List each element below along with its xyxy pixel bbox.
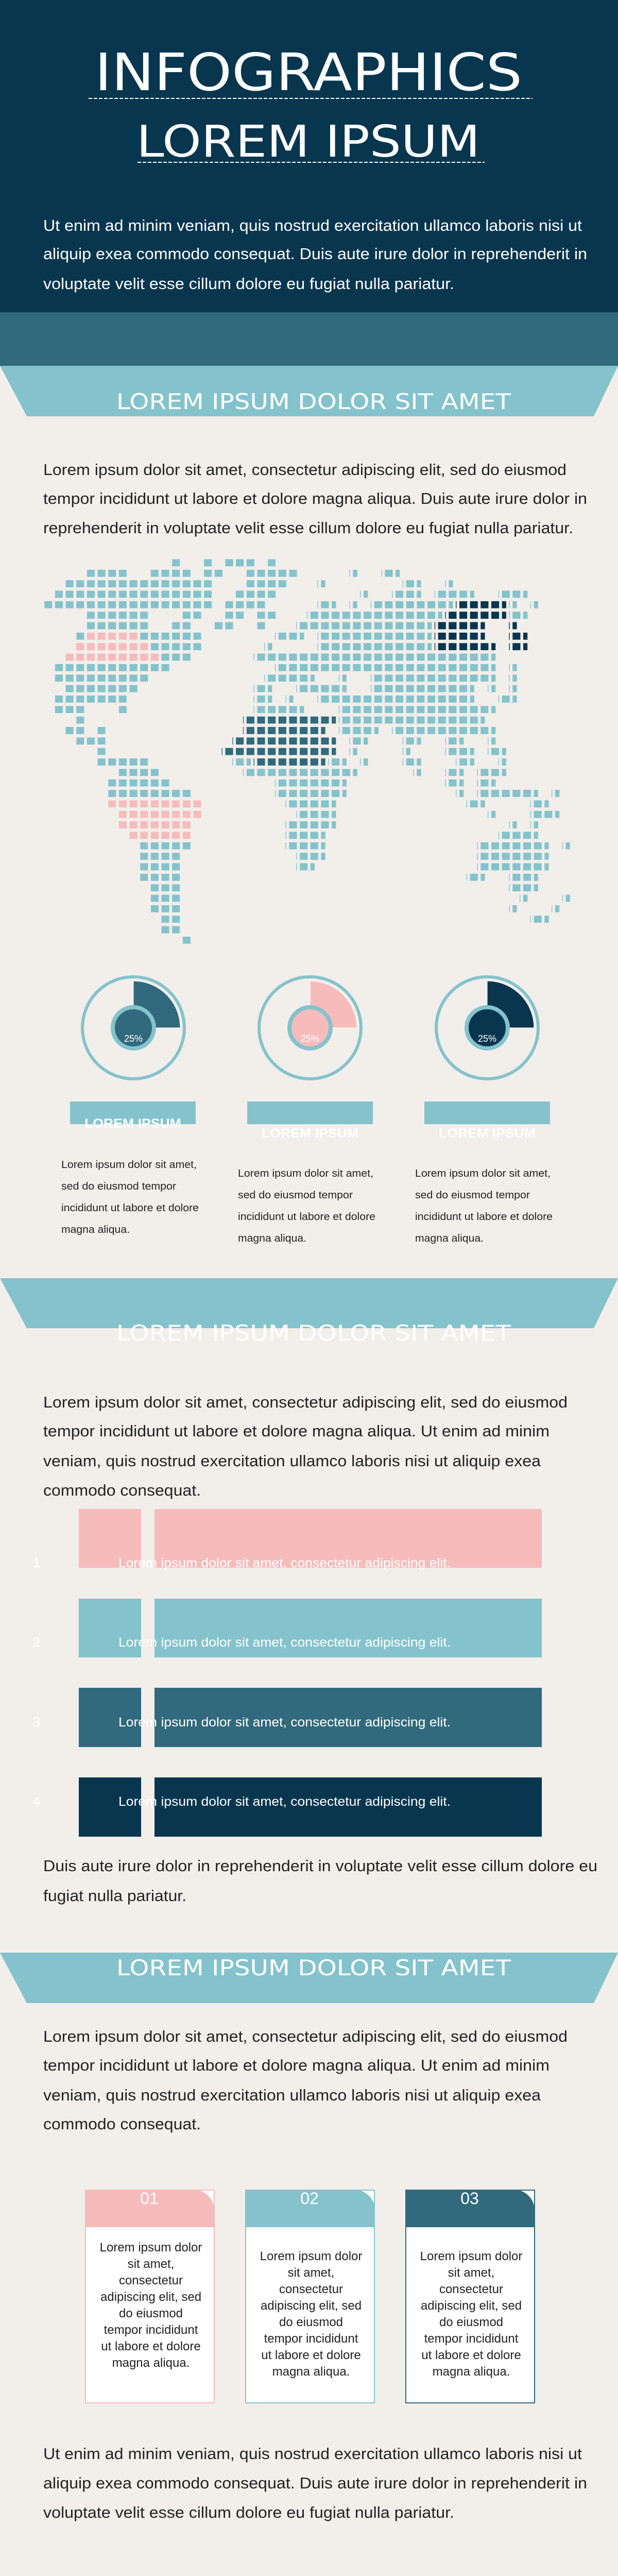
section 3 paragraph: tempor incididunt ut labore et dolore magna aliqua. Ut enim ad minim	[43, 2056, 550, 2074]
section 2 paragraph: Lorem ipsum dolor sit amet, consectetur adipiscing elit, sed do eiusmod	[43, 1393, 568, 1411]
card 03: 03	[460, 2189, 479, 2208]
card 02	[245, 2189, 375, 2403]
column text 3	[415, 1168, 553, 1244]
title line 1: INFOGRAPHICS	[95, 42, 522, 103]
section 2 paragraph: tempor incididunt ut labore et dolore magna aliqua. Ut enim ad minim	[43, 1422, 550, 1440]
world map (dotted)	[44, 559, 570, 944]
column text 1: sed do eiusmod tempor	[61, 1181, 176, 1192]
donut chart 3: 25%	[478, 1033, 496, 1044]
section 3 paragraph: veniam, quis nostrud exercitation ullamco laboris nisi ut aliquip exea	[43, 2086, 541, 2104]
section 3 ribbon heading	[0, 1953, 618, 2003]
card 01: ut labore et dolore	[101, 2340, 201, 2353]
bar 4: 4	[33, 1793, 40, 1809]
section 3 paragraph: Lorem ipsum dolor sit amet, consectetur adipiscing elit, sed do eiusmod	[43, 2027, 568, 2045]
donut chart 2: 25%	[301, 1033, 319, 1044]
label box 3: LOREM IPSUM	[439, 1126, 536, 1141]
bar 3: 3	[33, 1714, 40, 1730]
header panel	[0, 0, 618, 312]
card 01: adipiscing elit, sed	[100, 2290, 201, 2304]
header paragraph: Ut enim ad minim veniam, quis nostrud exercitation ullamco laboris nisi ut	[43, 216, 582, 234]
card 03: magna aliqua.	[433, 2365, 510, 2379]
bar 1	[33, 1509, 542, 1570]
donut chart 1	[82, 977, 184, 1079]
bar 1: 1	[33, 1555, 40, 1570]
column text 2: Lorem ipsum dolor sit amet,	[238, 1168, 373, 1179]
card 01: magna aliqua.	[112, 2356, 190, 2370]
card 03: do eiusmod	[439, 2315, 503, 2329]
label box 2: LOREM IPSUM	[262, 1126, 358, 1141]
card 02: tempor incididunt	[264, 2332, 358, 2346]
section 1 ribbon heading: LOREM IPSUM DOLOR SIT AMET	[116, 389, 511, 414]
card 03	[405, 2189, 535, 2403]
column text 1: Lorem ipsum dolor sit amet,	[61, 1159, 197, 1171]
bar 1: Lorem ipsum dolor sit amet, consectetur adipiscing elit.	[118, 1556, 451, 1570]
section 3 closing paragraph	[43, 2445, 587, 2521]
bar 2: 2	[33, 1634, 40, 1650]
section 3 closing paragraph: voluptate velit esse cillum dolore eu fugiat nulla pariatur.	[43, 2503, 454, 2521]
card 01	[85, 2189, 214, 2403]
card 03: tempor incididunt	[424, 2332, 519, 2346]
section 3 paragraph	[43, 2027, 568, 2133]
column text 1: incididunt ut labore et dolore	[61, 1202, 199, 1214]
card 02: Lorem ipsum dolor	[260, 2249, 362, 2263]
card 02: do eiusmod	[279, 2315, 343, 2329]
label box 1: LOREM IPSUM	[84, 1116, 181, 1131]
section 2 closing paragraph	[43, 1857, 597, 1905]
bar 3	[33, 1688, 542, 1747]
card 02: adipiscing elit, sed	[261, 2299, 362, 2313]
header paragraph	[43, 216, 587, 293]
teal band	[0, 312, 618, 366]
column text 2: magna aliqua.	[238, 1233, 306, 1244]
label box 1	[70, 1101, 196, 1131]
section 3 closing paragraph: Ut enim ad minim veniam, quis nostrud exercitation ullamco laboris nisi ut	[43, 2445, 582, 2463]
section 1 ribbon heading	[0, 366, 618, 416]
column text 1: magna aliqua.	[61, 1224, 130, 1235]
section 2 paragraph	[43, 1393, 568, 1499]
card 01: 01	[140, 2189, 159, 2208]
card 02: ut labore et dolore	[261, 2348, 361, 2362]
card 02: sit amet,	[288, 2266, 334, 2280]
section 1 paragraph: Lorem ipsum dolor sit amet, consectetur adipiscing elit, sed do eiusmod	[43, 461, 566, 479]
section 1 paragraph: reprehenderit in voluptate velit esse cillum dolore eu fugiat nulla pariatur.	[43, 519, 573, 537]
section 1 paragraph: tempor incididunt ut labore et dolore magna aliqua. Duis aute irure dolor in	[43, 489, 587, 507]
section 2 ribbon heading	[0, 1278, 618, 1346]
card 03: sit amet,	[448, 2266, 494, 2280]
column text 3: magna aliqua.	[415, 1233, 484, 1244]
section 3 paragraph: commodo consequat.	[43, 2115, 201, 2133]
card 01: do eiusmod	[119, 2307, 183, 2320]
column text 1	[61, 1159, 199, 1235]
card 01: Lorem ipsum dolor	[100, 2241, 202, 2255]
header paragraph: aliquip exea commodo consequat. Duis aute irure dolor in reprehenderit in	[43, 245, 587, 263]
section 1 paragraph	[43, 461, 587, 537]
column text 2	[238, 1168, 375, 1244]
section 2 paragraph: commodo consequat.	[43, 1481, 201, 1499]
bar 3: Lorem ipsum dolor sit amet, consectetur adipiscing elit.	[118, 1715, 451, 1730]
donut chart 1: 25%	[124, 1033, 143, 1044]
donut chart 2	[259, 977, 361, 1079]
column text 3: sed do eiusmod tempor	[415, 1190, 530, 1201]
card 02: magna aliqua.	[272, 2365, 350, 2379]
title line 2: LOREM IPSUM	[136, 116, 480, 167]
card 03: adipiscing elit, sed	[421, 2299, 522, 2313]
column text 3: Lorem ipsum dolor sit amet,	[415, 1168, 551, 1179]
section 3 closing paragraph: aliquip exea commodo consequat. Duis aute irure dolor in reprehenderit in	[43, 2474, 587, 2492]
card 02: consectetur	[279, 2282, 343, 2296]
section 2 ribbon heading: LOREM IPSUM DOLOR SIT AMET	[116, 1320, 511, 1346]
label box 3	[424, 1101, 550, 1141]
bar 4: Lorem ipsum dolor sit amet, consectetur adipiscing elit.	[118, 1794, 451, 1809]
card 01: tempor incididunt	[104, 2323, 198, 2337]
bar 4	[33, 1777, 542, 1837]
column text 2: incididunt ut labore et dolore	[238, 1211, 375, 1223]
bar 2	[33, 1599, 542, 1657]
section 2 paragraph: veniam, quis nostrud exercitation ullamco laboris nisi ut aliquip exea	[43, 1452, 541, 1470]
card 01: consectetur	[119, 2274, 183, 2287]
label box 2	[247, 1101, 373, 1141]
bar 2: Lorem ipsum dolor sit amet, consectetur adipiscing elit.	[118, 1635, 451, 1650]
card 03: consectetur	[439, 2282, 503, 2296]
card 01: sit amet,	[128, 2257, 174, 2271]
section 2 closing paragraph: fugiat nulla pariatur.	[43, 1887, 186, 1905]
section 2 closing paragraph: Duis aute irure dolor in reprehenderit in voluptate velit esse cillum dolore eu	[43, 1857, 597, 1875]
card 03: Lorem ipsum dolor	[420, 2249, 522, 2263]
card 03: ut labore et dolore	[421, 2348, 521, 2362]
section 3 ribbon heading: LOREM IPSUM DOLOR SIT AMET	[116, 1955, 511, 1980]
header paragraph: voluptate velit esse cillum dolore eu fugiat nulla pariatur.	[43, 275, 454, 293]
donut chart 3	[436, 977, 538, 1079]
column text 3: incididunt ut labore et dolore	[415, 1211, 553, 1223]
column text 2: sed do eiusmod tempor	[238, 1190, 353, 1201]
card 02: 02	[300, 2189, 319, 2208]
